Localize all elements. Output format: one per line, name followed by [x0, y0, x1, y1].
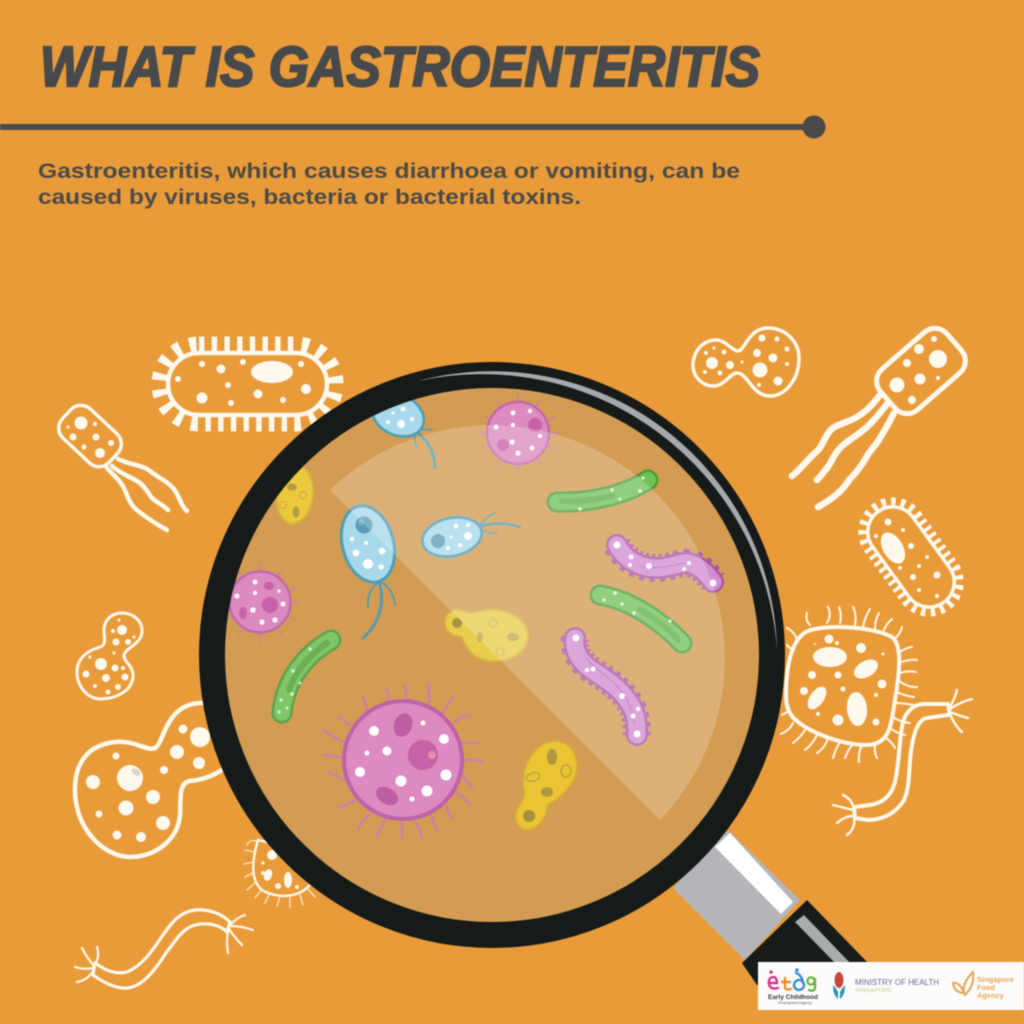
outline microbe: budding cell top right — [693, 328, 799, 396]
outline microbe: small budding cell left — [77, 613, 142, 699]
outline microbe: tube worm right — [833, 690, 972, 835]
logo: early childhood agency: Development Agency — [778, 1001, 812, 1005]
blue microbe top — [365, 385, 435, 468]
outline microbe: hairy cell right — [781, 607, 917, 762]
intro text — [38, 159, 740, 209]
outline microbe: flagellate top right — [792, 322, 972, 507]
green rod top — [557, 476, 648, 511]
logo: ministry of health: MINISTRY OF HEALTH — [855, 978, 939, 987]
logo: ministry of health: SINGAPORE — [855, 988, 893, 994]
lens glare — [330, 425, 725, 820]
magnifier lens — [222, 385, 762, 925]
magnifier handle — [673, 830, 870, 985]
outline microbe: flagellate top left — [53, 400, 187, 530]
logo strip — [758, 962, 1024, 1010]
logo: early childhood agency: Early Childhood — [768, 994, 818, 1001]
yellow microbe upper left — [273, 464, 317, 526]
yellow microbe lower right — [515, 741, 577, 830]
outline microbe: large budding cell left — [75, 703, 237, 857]
pink microbe large — [323, 683, 482, 838]
title: WHAT IS GASTROENTERITIS — [40, 35, 760, 99]
intro text: Gastroenteritis, which causes diarrhoea or vomiting, can be — [38, 159, 740, 183]
green rod middle — [600, 591, 682, 643]
logo: singapore food agency: Singapore — [977, 975, 1014, 984]
pink microbe top — [478, 393, 559, 473]
blue microbe large — [333, 500, 403, 638]
magnifier ring — [212, 371, 777, 935]
logo: early childhood agency — [768, 968, 818, 1005]
outline microbe: small hairy cell bottom — [244, 840, 320, 907]
logo: singapore food agency: Agency — [977, 991, 1005, 1000]
logo: singapore food agency — [953, 972, 1014, 1000]
yellow microbe centre — [445, 610, 528, 661]
green rod lower left — [277, 640, 331, 714]
purple worm lower — [572, 634, 640, 738]
purple worm upper — [614, 542, 716, 586]
title rule with dot — [0, 116, 826, 138]
pink microbe left — [220, 563, 300, 643]
outline microbe: spiky rod top left — [168, 353, 327, 415]
blue microbe middle — [419, 512, 520, 562]
outline microbe: tube worm bottom — [75, 910, 253, 988]
intro text: caused by viruses, bacteria or bacterial toxins. — [38, 185, 581, 209]
logo: ministry of health — [833, 972, 939, 999]
logo: singapore food agency: Food — [977, 983, 996, 992]
outline microbe: spiky rod right — [858, 497, 964, 617]
